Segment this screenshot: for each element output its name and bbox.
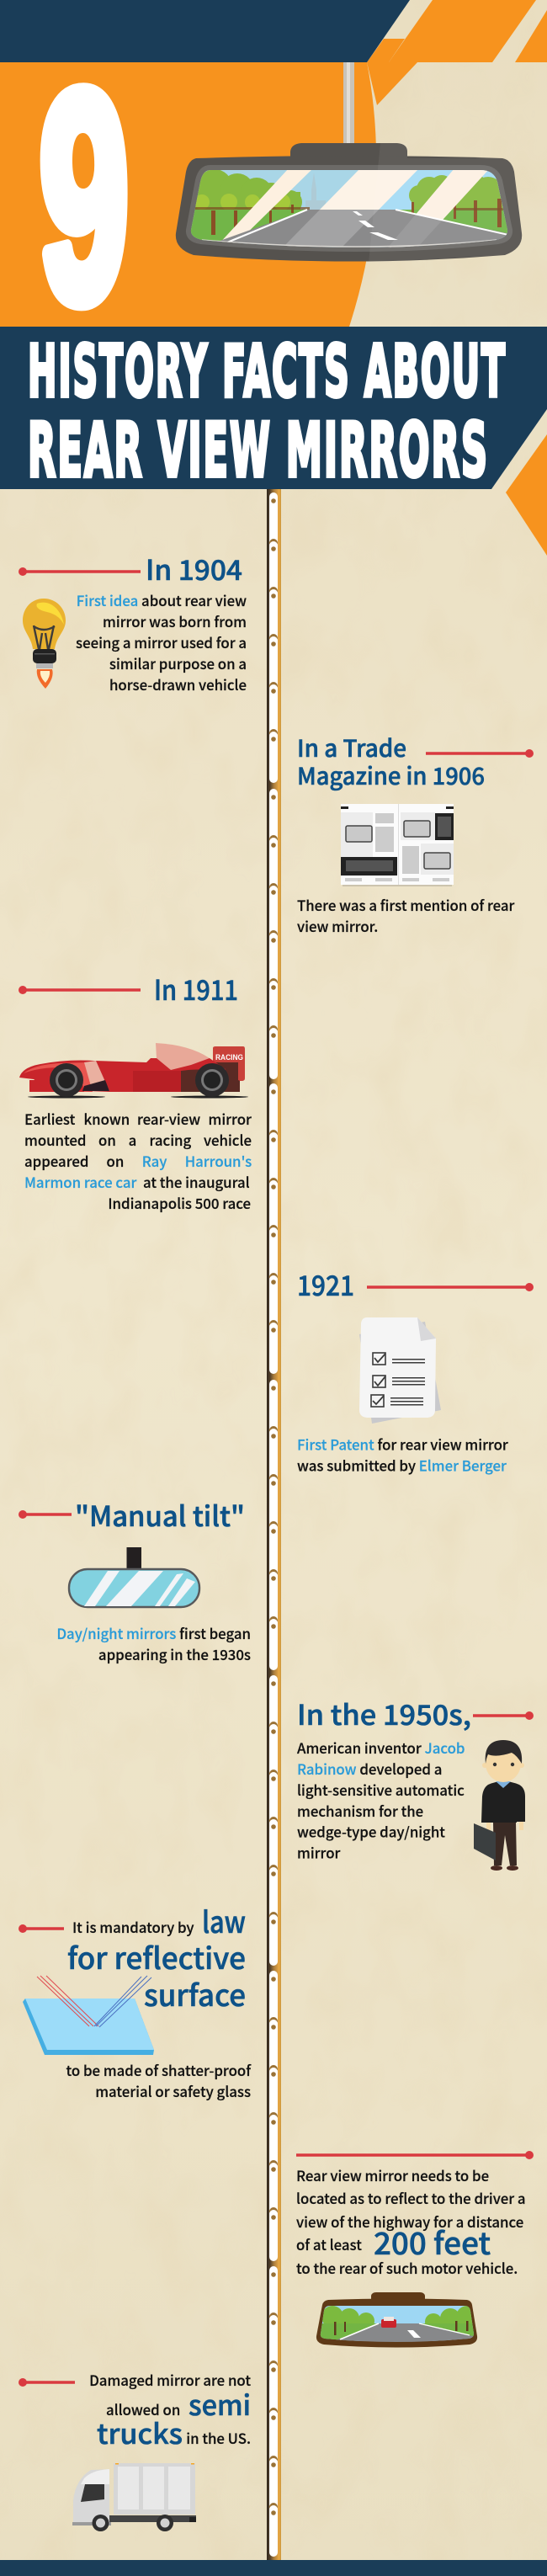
text block: Earliest xyxy=(24,1109,76,1129)
connector xyxy=(426,749,534,758)
panel: 1904 xyxy=(19,548,247,695)
text block: rear-view xyxy=(137,1109,200,1129)
text block: Indianapolis 500 race xyxy=(108,1193,251,1213)
heading: In 1911 xyxy=(154,968,238,1009)
panel: manual tilt xyxy=(19,1494,251,1664)
header banner xyxy=(0,0,547,556)
text block: in the US. xyxy=(186,2428,251,2448)
top navy band xyxy=(0,0,410,62)
text block xyxy=(296,2165,526,2278)
text block: light-sensitive automatic xyxy=(297,1780,465,1800)
heading: 1921 xyxy=(297,1264,354,1304)
text block xyxy=(297,895,515,936)
text block: view of the highway for a distance xyxy=(296,2211,523,2232)
panel: law xyxy=(19,1899,252,2101)
panel: 1911 xyxy=(19,968,252,1213)
orange panel xyxy=(0,62,376,327)
icon: truck xyxy=(72,2463,196,2531)
panel: 1906 trade magazine xyxy=(297,731,534,936)
text block: on xyxy=(98,1130,116,1150)
text block: located as to reflect to the driver a xyxy=(296,2188,526,2208)
text block: First Patent for rear view mirror xyxy=(297,1434,508,1455)
panel: 1921 xyxy=(297,1264,534,1475)
title text xyxy=(28,330,507,493)
heading with text xyxy=(67,1899,246,2015)
text block: at the inaugural xyxy=(143,1172,250,1192)
text block: material or safety glass xyxy=(95,2081,251,2101)
text block xyxy=(297,1738,465,1862)
heading with text: for reflective xyxy=(67,1935,246,1978)
text block: seeing a mirror used for a xyxy=(76,632,247,652)
text block: mirror xyxy=(209,1109,252,1129)
title band xyxy=(0,327,547,489)
icon: checklist document xyxy=(359,1317,441,1424)
rear view mirror illustration xyxy=(176,62,522,263)
text block: horse-drawn vehicle xyxy=(109,674,247,695)
text block xyxy=(76,590,247,695)
text block: was submitted by Elmer Berger xyxy=(297,1455,507,1475)
heading: "Manual tilt" xyxy=(75,1494,245,1535)
text block: Marmon race car xyxy=(24,1172,137,1192)
icon: mirror with following car xyxy=(316,2292,478,2347)
heading: In a Trade xyxy=(297,731,406,764)
text block: a xyxy=(129,1130,136,1150)
footer band xyxy=(0,2560,547,2576)
top right orange stripes xyxy=(367,0,547,105)
icon: racing car xyxy=(19,1043,248,1098)
connector xyxy=(19,2378,75,2387)
text block: mirror was born from xyxy=(103,611,247,631)
text block xyxy=(56,1623,251,1664)
text block: allowed on xyxy=(106,2399,180,2419)
text block xyxy=(89,2370,251,2452)
text block: appeared xyxy=(24,1151,88,1171)
text block: trucks xyxy=(97,2412,183,2452)
panel: 1950s xyxy=(297,1693,534,1871)
panel: semi trucks xyxy=(19,2370,251,2531)
connector xyxy=(367,1283,534,1291)
heading: In the 1950s, xyxy=(297,1693,471,1733)
icon: day night mirror xyxy=(69,1547,199,1607)
connector xyxy=(19,1924,64,1933)
text block: on xyxy=(106,1151,124,1171)
heading xyxy=(297,731,485,792)
text block: Rear view mirror needs to be xyxy=(296,2165,489,2185)
text block: mechanism for the xyxy=(297,1801,423,1821)
text block: First idea about rear view xyxy=(77,590,247,610)
icon: light bulb rocket xyxy=(23,599,66,689)
number 9: 9 xyxy=(40,30,129,362)
icon: racing car: RACING xyxy=(215,1053,243,1062)
connector xyxy=(296,2151,534,2159)
text block xyxy=(297,1434,508,1475)
text block: appearing in the 1930s xyxy=(98,1644,251,1664)
connector xyxy=(19,986,141,994)
heading with text: It is mandatory by xyxy=(72,1917,194,1937)
text block: mirror xyxy=(297,1842,341,1862)
heading: Magazine in 1906 xyxy=(297,758,485,792)
connector xyxy=(19,1510,72,1519)
heading: In 1904 xyxy=(146,548,242,588)
text block: view mirror. xyxy=(297,916,378,936)
text block: racing xyxy=(150,1130,192,1150)
icon: inventor with briefcase xyxy=(474,1740,525,1871)
text block: semi xyxy=(189,2383,251,2424)
text block: known xyxy=(84,1109,130,1129)
connector xyxy=(19,567,141,576)
text block: similar purpose on a xyxy=(109,653,247,673)
panel: 200 feet xyxy=(296,2151,534,2347)
timeline rail xyxy=(267,489,281,2560)
icon: reflective surface xyxy=(23,1976,154,2055)
text block: Ray xyxy=(142,1151,167,1171)
heading with text: law xyxy=(202,1899,246,1942)
magazine spread xyxy=(341,804,454,886)
text block xyxy=(24,1109,252,1213)
text block: to be made of shatter-proof xyxy=(66,2060,252,2080)
text block: Day/night mirrors first began xyxy=(56,1623,251,1643)
text block: Harroun's xyxy=(185,1151,252,1171)
text block: wedge-type day/night xyxy=(297,1822,445,1842)
connector xyxy=(473,1711,534,1720)
text block: There was a first mention of rear xyxy=(297,895,515,915)
text block: mounted xyxy=(24,1130,86,1150)
text block: 200 feet xyxy=(374,2220,491,2264)
text block: Damaged mirror are not xyxy=(89,2370,251,2390)
heading with text: surface xyxy=(144,1972,246,2015)
text block: American inventor Jacob xyxy=(297,1738,465,1758)
text block xyxy=(66,2060,252,2101)
text block: of at least xyxy=(296,2234,362,2254)
text block: vehicle xyxy=(204,1130,252,1150)
text block: Rabinow developed a xyxy=(297,1759,442,1779)
right orange triangle xyxy=(506,434,547,556)
text block: to the rear of such motor vehicle. xyxy=(296,2258,518,2278)
